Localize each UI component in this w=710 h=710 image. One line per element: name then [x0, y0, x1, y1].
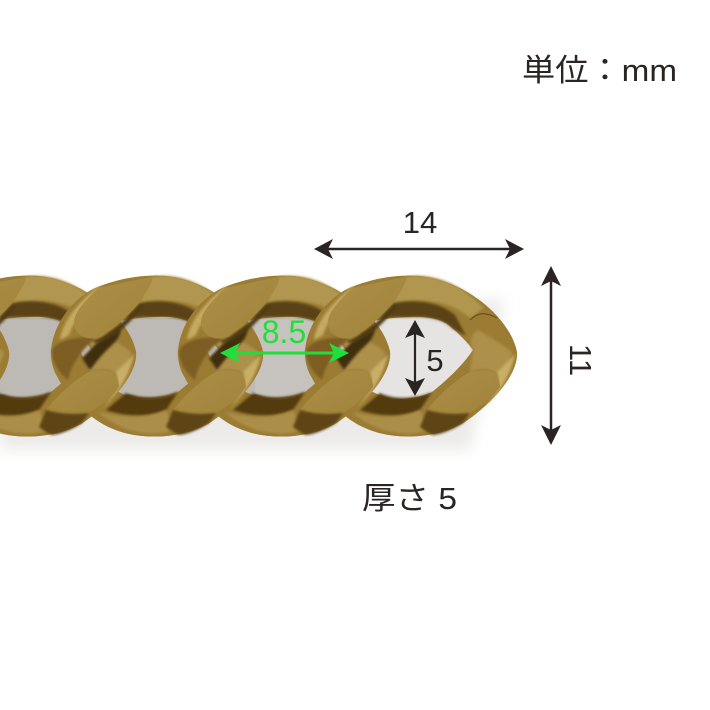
- soft shadow and hole background: [0, 300, 505, 450]
- width dimension: 14: [314, 205, 524, 259]
- inner width dimension: 8.5 (green): 8.5: [262, 314, 306, 350]
- lower right of each link, passing over the next link: [0, 345, 390, 436]
- thickness label: 厚さ 5: [362, 481, 457, 516]
- seam on the rightmost link: [470, 314, 497, 320]
- brass chain: [0, 275, 517, 437]
- height dimension: 11: [541, 266, 598, 445]
- chain link bodies: [0, 275, 517, 437]
- inner height dimension: 5: 5: [426, 343, 444, 378]
- inner width dimension: 8.5 (green): [220, 314, 349, 363]
- chain link flat faces: [0, 277, 515, 435]
- inner height dimension: 5: [405, 320, 444, 396]
- infographic: brass curb chain with dimensions: [0, 54, 675, 512]
- inner shading where links interlock: [0, 326, 375, 380]
- width dimension: 14: 14: [403, 205, 437, 240]
- height dimension: 11: 11: [563, 344, 598, 376]
- unit label: 単位：mm: [522, 53, 677, 88]
